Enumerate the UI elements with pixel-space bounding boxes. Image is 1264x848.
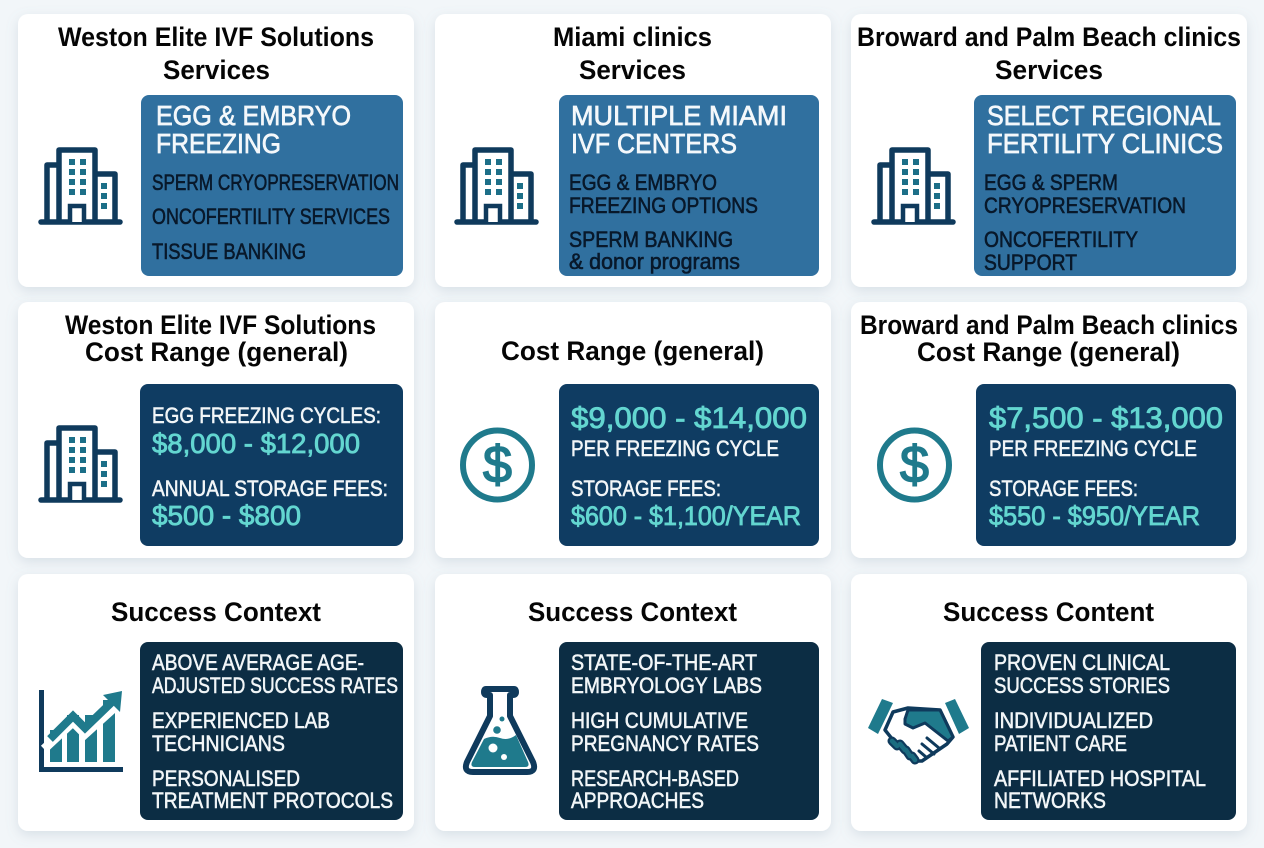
cost box: $500 - $800: [152, 500, 301, 531]
heading: Weston services: [58, 22, 374, 85]
heading: Miami services: Miami clinics: [553, 22, 712, 52]
panel: Miami services: [435, 14, 831, 287]
heading: Miami services: [553, 22, 712, 85]
cost box: $550 - $950/YEAR: [989, 501, 1200, 531]
heading: Weston cost: [65, 310, 376, 367]
services box: EGG & EMBRYO: [569, 170, 717, 195]
services box: ONCOFERTILITY SERVICES: [152, 204, 390, 229]
success box: TECHNICIANS: [152, 731, 285, 756]
success box: [981, 642, 1236, 820]
cost box: $7,500 - $13,000: [989, 402, 1223, 435]
cost box: [140, 384, 403, 546]
success box: AFFILIATED HOSPITAL: [994, 766, 1206, 791]
icon: building: [41, 150, 120, 222]
heading: Broward services: Services: [995, 55, 1103, 85]
cost box: [559, 384, 819, 546]
cost box: PER FREEZING CYCLE: [989, 436, 1197, 461]
services box: SPERM BANKING: [569, 227, 733, 252]
icon: dollar: [880, 430, 949, 500]
panel: Weston success: [18, 574, 414, 831]
services box: [559, 95, 819, 276]
cost box: ANNUAL STORAGE FEES:: [152, 476, 388, 501]
services box: & donor programs: [569, 249, 740, 274]
success box: ABOVE AVERAGE AGE-: [152, 650, 364, 675]
success box: ADJUSTED SUCCESS RATES: [152, 673, 398, 698]
cost box: STORAGE FEES:: [989, 476, 1138, 501]
panel: Broward success: [851, 574, 1247, 831]
services box: MULTIPLE MIAMI: [571, 100, 787, 131]
cost box: PER FREEZING CYCLE: [571, 436, 779, 461]
success box: HIGH CUMULATIVE: [571, 708, 748, 733]
success box: PROVEN CLINICAL: [994, 650, 1170, 675]
success box: TREATMENT PROTOCOLS: [152, 788, 393, 813]
cost box: [976, 384, 1236, 546]
success box: PREGNANCY RATES: [571, 731, 759, 756]
cost box: STORAGE FEES:: [571, 476, 721, 501]
success box: EMBRYOLOGY LABS: [571, 673, 762, 698]
heading: Broward services: Broward and Palm Beach clinics: [857, 22, 1241, 52]
panel: Miami success: [435, 574, 831, 831]
success box: EXPERIENCED LAB: [152, 708, 330, 733]
services box: SPERM CRYOPRESERVATION: [152, 170, 399, 195]
icon: growth chart: [42, 690, 123, 770]
services box: IVF CENTERS: [571, 128, 737, 159]
success box: APPROACHES: [571, 788, 704, 813]
services box: [141, 95, 403, 276]
services box: FERTILITY CLINICS: [987, 128, 1223, 159]
panel: Miami cost: [435, 302, 831, 558]
icon: building: [457, 150, 536, 222]
heading: Broward cost: [860, 310, 1238, 367]
cost box: EGG FREEZING CYCLES:: [152, 403, 381, 428]
cost box: $8,000 - $12,000: [152, 428, 360, 459]
panel: Weston cost: [18, 302, 414, 558]
success box: INDIVIDUALIZED: [994, 708, 1153, 733]
services box: CRYOPRESERVATION: [984, 193, 1186, 218]
services box: FREEZING OPTIONS: [569, 193, 758, 218]
icon: dollar: [463, 430, 532, 500]
icon: building: [41, 428, 120, 500]
panel: Broward services: [851, 14, 1247, 287]
cost box: $9,000 - $14,000: [571, 402, 807, 435]
success box: PERSONALISED: [152, 766, 300, 791]
icon: flask: [466, 689, 534, 772]
services box: SUPPORT: [984, 250, 1077, 275]
panel: Weston services: [18, 14, 414, 287]
heading: Miami success: Success Context: [528, 597, 737, 627]
heading: Weston cost: Cost Range (general): [85, 337, 348, 367]
heading: Miami services: Services: [579, 55, 686, 85]
heading: Broward services: [857, 22, 1241, 85]
cost box: $600 - $1,100/YEAR: [571, 501, 801, 531]
services box: TISSUE BANKING: [152, 239, 306, 264]
success box: SUCCESS STORIES: [994, 673, 1170, 698]
services box: EGG & EMBRYO: [156, 100, 351, 131]
heading: Weston services: Weston Elite IVF Solutions: [58, 22, 374, 52]
services box: EGG & SPERM: [984, 170, 1118, 195]
panel: Broward cost: [851, 302, 1247, 558]
heading: Weston services: Services: [163, 55, 270, 85]
services box: [974, 95, 1236, 276]
success box: [140, 642, 403, 820]
heading: Weston cost: Weston Elite IVF Solutions: [65, 310, 376, 340]
success box: NETWORKS: [994, 788, 1106, 813]
heading: Weston success: Success Context: [111, 597, 321, 627]
heading: Miami cost: Cost Range (general): [501, 336, 764, 366]
success box: [559, 642, 819, 820]
heading: Broward success: Success Content: [943, 597, 1154, 627]
icon: handshake: [868, 699, 969, 761]
icon: dollar: $: [483, 436, 512, 494]
success box: PATIENT CARE: [994, 731, 1127, 756]
success box: RESEARCH-BASED: [571, 766, 739, 791]
icon: dollar: $: [900, 436, 929, 494]
success box: STATE-OF-THE-ART: [571, 650, 757, 675]
heading: Broward cost: Cost Range (general): [917, 337, 1180, 367]
services box: SELECT REGIONAL: [987, 100, 1221, 131]
services box: FREEZING: [156, 128, 281, 159]
services box: ONCOFERTILITY: [984, 227, 1138, 252]
icon: building: [874, 150, 953, 222]
